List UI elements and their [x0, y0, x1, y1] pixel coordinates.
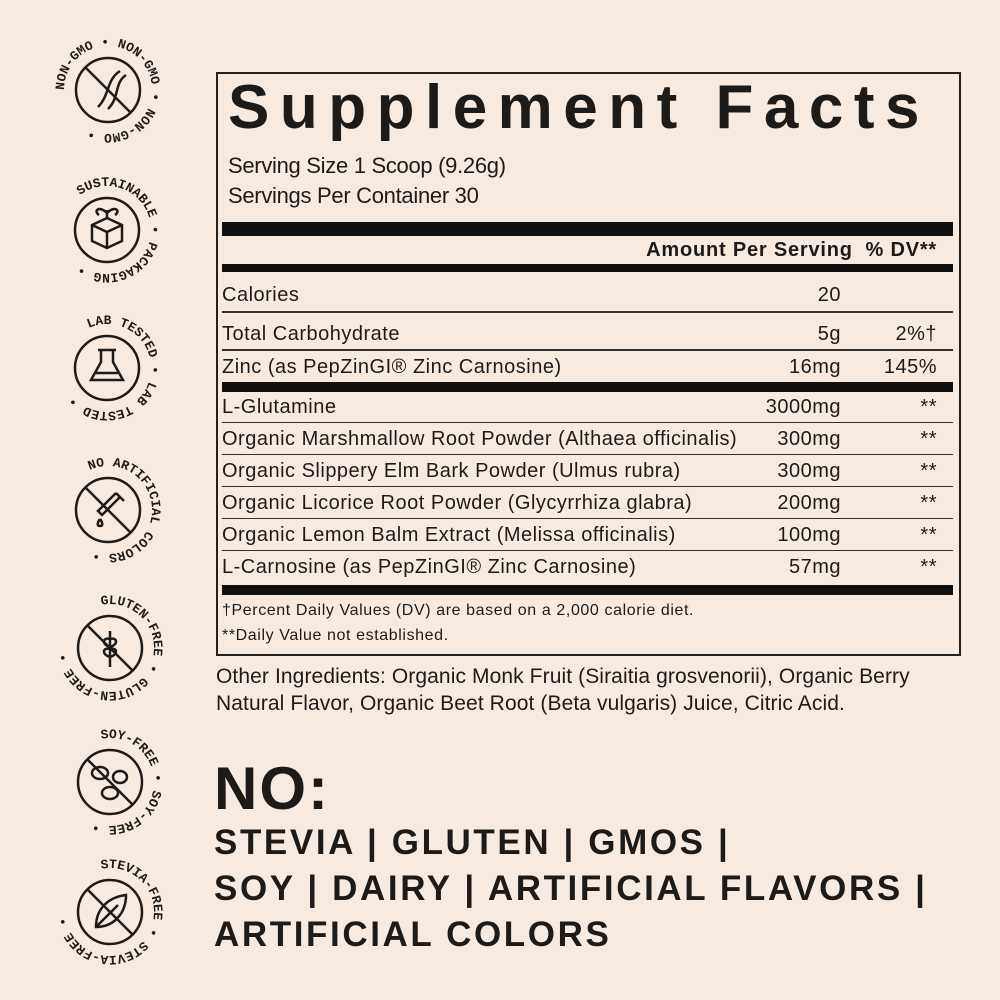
text: 3000mg [766, 396, 841, 418]
serving info: Servings Per Container 30 [228, 183, 479, 208]
serving info [228, 153, 506, 208]
other ingredients [216, 665, 910, 715]
icon: stevia-free: STEVIA-FREE • STEVIA-FREE • [60, 859, 163, 965]
text: 300mg [777, 460, 841, 482]
text: ** [920, 396, 937, 418]
text: 16mg [789, 356, 841, 378]
text: Organic Licorice Root Powder (Glycyrrhiza glabra) [222, 492, 692, 514]
text: Total Carbohydrate [222, 323, 400, 345]
icon: lab tested: LAB TESTED • LAB TESTED • [71, 316, 158, 421]
text: 57mg [789, 556, 841, 578]
icon: non-gmo: NON-GMO • NON-GMO • NON-GMO • [55, 38, 160, 143]
text: 20 [818, 284, 841, 306]
text: 200mg [777, 492, 841, 514]
NO list: SOY | DAIRY | ARTIFICIAL FLAVORS | [214, 869, 927, 908]
text: 2%† [895, 323, 937, 345]
header row: Amount Per Serving % DV** [646, 239, 937, 261]
text: Organic Marshmallow Root Powder (Althaea officinalis) [222, 428, 737, 450]
NO list: ARTIFICIAL COLORS [214, 915, 611, 954]
icon: sustainable packaging: SUSTAINABLE • PACKAGING • [76, 177, 158, 283]
footnotes: †Percent Daily Values (DV) are based on a 2,000 calorie diet. [222, 602, 694, 619]
text: Organic Slippery Elm Bark Powder (Ulmus rubra) [222, 460, 681, 482]
NO heading: NO: [214, 755, 330, 822]
text: L-Glutamine [222, 396, 336, 418]
text: ** [920, 524, 937, 546]
text: ** [920, 428, 937, 450]
other ingredients: Natural Flavor, Organic Beet Root (Beta vulgaris) Juice, Citric Acid. [216, 692, 845, 715]
text: Zinc (as PepZinGI® Zinc Carnosine) [222, 356, 562, 378]
text: ** [920, 556, 937, 578]
panel: supplement facts [216, 72, 961, 656]
nutrient rows [222, 284, 953, 378]
text: ** [920, 492, 937, 514]
icons column [55, 38, 163, 965]
other ingredients: Other Ingredients: Organic Monk Fruit (Siraitia grosvenorii), Organic Berry [216, 665, 910, 688]
title: Supplement Facts [228, 73, 930, 142]
text: Organic Lemon Balm Extract (Melissa officinalis) [222, 524, 676, 546]
icon: soy-free: SOY-FREE • SOY-FREE • [94, 729, 161, 835]
ingredient rows [222, 396, 953, 578]
NO list: STEVIA | GLUTEN | GMOS | [214, 823, 730, 862]
footnotes [222, 602, 694, 644]
serving info: Serving Size 1 Scoop (9.26g) [228, 153, 506, 178]
text: Calories [222, 284, 299, 306]
text: 300mg [777, 428, 841, 450]
icon: gluten-free: GLUTEN-FREE • GLUTEN-FREE • [60, 595, 163, 701]
text: ** [920, 460, 937, 482]
text: L-Carnosine (as PepZinGI® Zinc Carnosine) [222, 556, 636, 578]
text: 5g [818, 323, 841, 345]
footnotes: **Daily Value not established. [222, 627, 449, 644]
text: 100mg [777, 524, 841, 546]
NO list [214, 823, 927, 954]
icon: no artificial colors: NO ARTIFICIAL COLORS • [88, 458, 161, 562]
text: 145% [884, 356, 937, 378]
